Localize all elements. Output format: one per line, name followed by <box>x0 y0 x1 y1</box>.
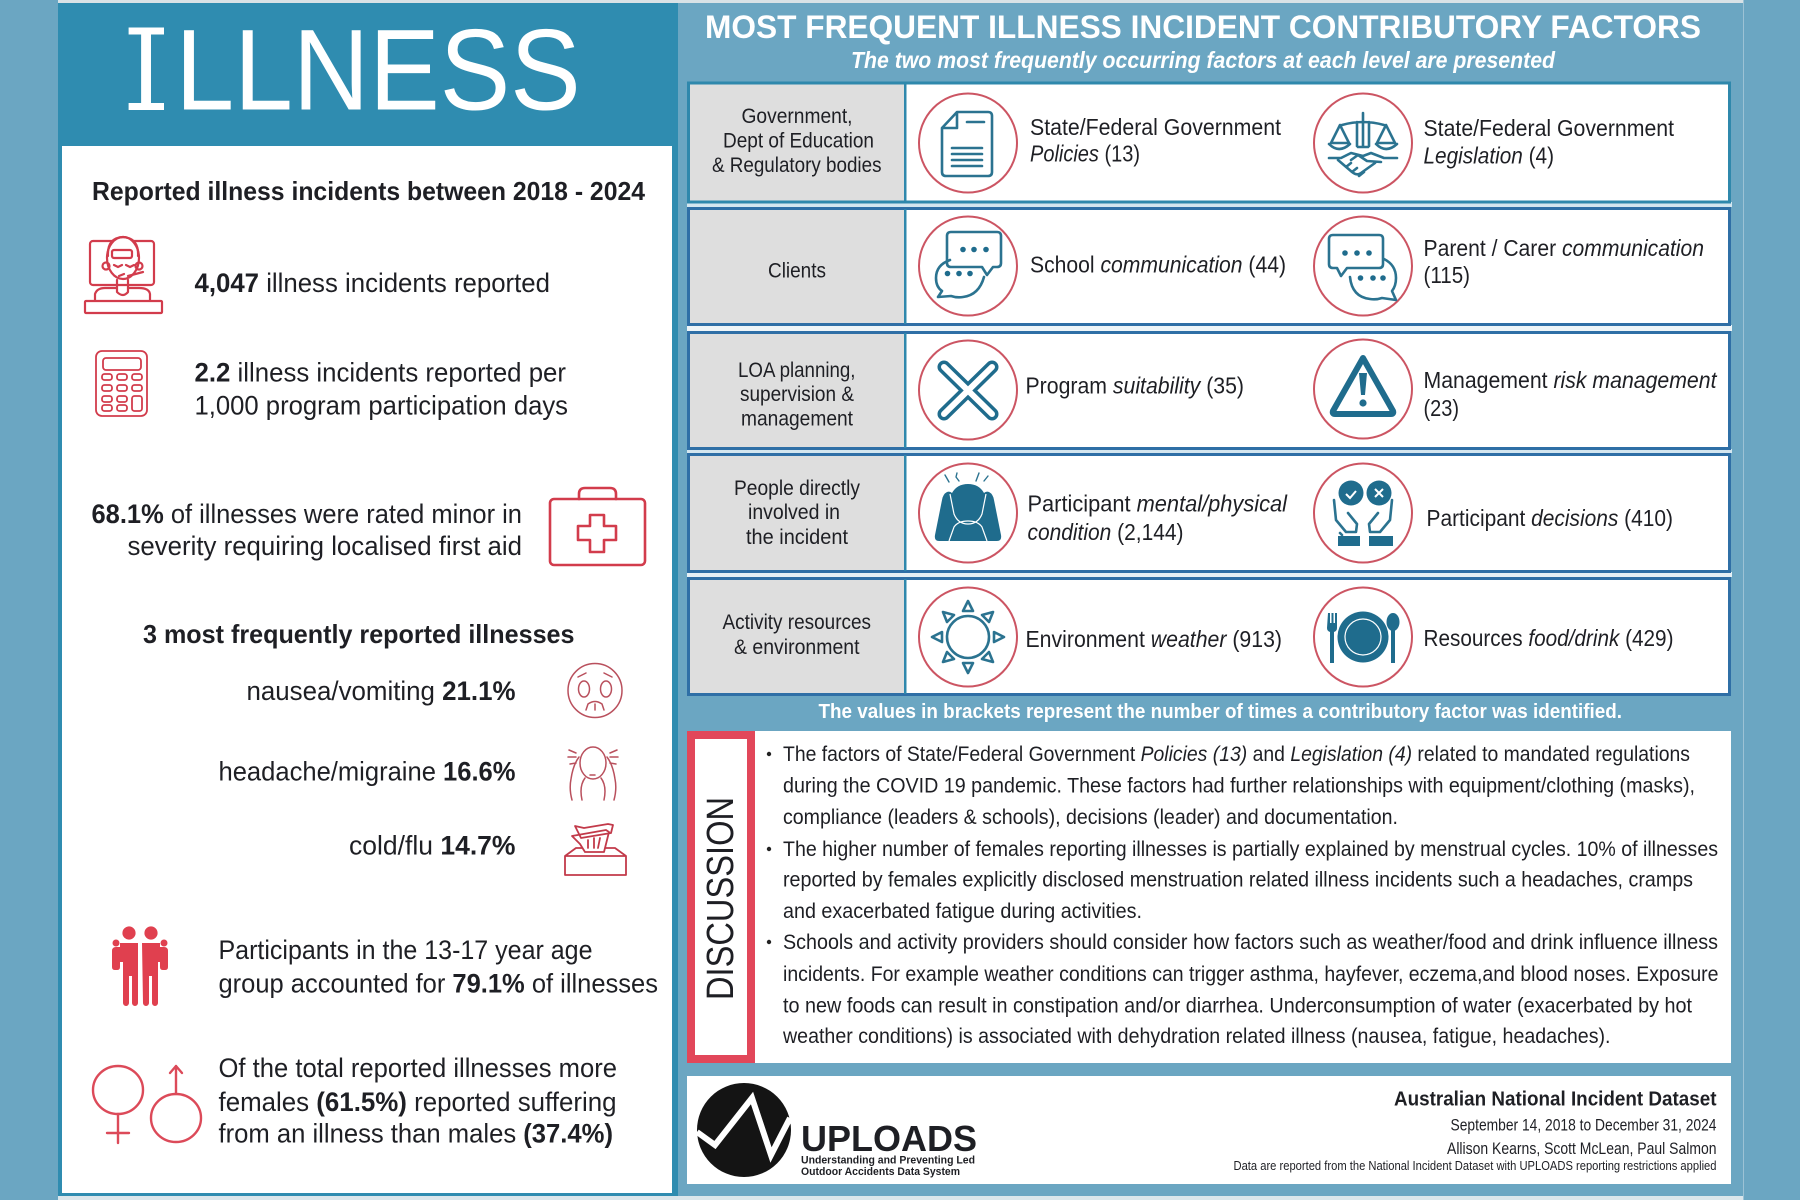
icon: document <box>919 94 1017 192</box>
factor: risk management: (23) <box>1424 395 1459 421</box>
factor: weather: Environment weather (913) <box>1026 626 1282 652</box>
dataset credits: Allison Kearns, Scott McLean, Paul Salmon <box>1447 1139 1716 1158</box>
icon: cross <box>919 340 1017 440</box>
level label: Activity resources <box>722 611 871 634</box>
dataset credits: Data are reported from the National Incident Dataset with UPLOADS reporting restrictions applied <box>1234 1158 1716 1173</box>
level label: LOA planning, <box>738 359 856 382</box>
level label: involved in <box>748 501 840 524</box>
panel: illness statistics <box>58 3 678 1196</box>
heading: contributory factors: MOST FREQUENT ILLNESS INCIDENT CONTRIBUTORY FACTORS <box>705 9 1701 45</box>
factor: policies: Policies (13) <box>1030 140 1140 166</box>
icon: decision hands <box>1314 464 1412 562</box>
factor: food and drink: Resources food/drink (429) <box>1424 625 1674 651</box>
logo: UPLOADS <box>697 1083 977 1178</box>
logo: UPLOADS: UPLOADS <box>801 1118 977 1159</box>
level label: supervision & <box>740 383 854 406</box>
text: age group: Participants in the 13-17 year age <box>218 935 592 965</box>
subtitle: The two most frequently occurring factors at each level are presented <box>851 47 1556 73</box>
icon: sick person at monitor <box>85 237 162 313</box>
text: nausea: nausea/vomiting 21.1% <box>246 676 516 706</box>
text: incident rate: 2.2 illness incidents reported per <box>194 358 566 388</box>
factor: parent communication <box>1424 235 1704 288</box>
level label <box>738 359 856 430</box>
table: contributory factors by level <box>687 83 1732 694</box>
note: values in brackets: The values in brackets represent the number of times a contributory factor was identified. <box>818 701 1622 723</box>
row: LOA planning <box>688 332 1730 448</box>
factor: mental physical condition <box>1028 490 1288 545</box>
text: gender split: females (61.5%) reported suffering <box>218 1087 616 1117</box>
level label: & Regulatory bodies <box>712 154 882 177</box>
level label: & environment <box>734 636 860 659</box>
level label: Government, <box>742 105 852 128</box>
discussion text: Schools and activity providers should consider how factors such as weather/food and drink influence illness <box>783 931 1718 954</box>
panel: discussion <box>687 731 1731 1063</box>
factor: risk management <box>1424 367 1718 421</box>
discussion text: weather conditions) is associated with dehydration related illness (nausea, fatigue, headaches). <box>782 1025 1610 1048</box>
factor: school communication: School communication (44) <box>1030 252 1286 278</box>
factor: mental physical condition: Participant mental/physical <box>1028 490 1288 516</box>
dataset credits <box>1234 1088 1717 1173</box>
icon: first aid kit <box>550 488 645 565</box>
row: government <box>688 83 1730 202</box>
factor: legislation <box>1424 115 1675 168</box>
level label: Clients <box>768 260 826 282</box>
icon: tissue box <box>565 824 626 875</box>
text: gender split: from an illness than males (37.4%) <box>218 1118 613 1148</box>
icon: sun <box>919 588 1017 686</box>
dataset credits: September 14, 2018 to December 31, 2024 <box>1450 1116 1716 1134</box>
text: incident rate <box>194 358 568 420</box>
discussion text: The higher number of females reporting illnesses is partially explained by menstrual cycles. 10% of illnesses <box>783 838 1718 861</box>
level label: management <box>741 408 853 430</box>
icon: female and male symbols <box>93 1066 201 1143</box>
discussion text: to new foods can result in constipation and/or diarrhea. Underconsumption of water (exacerbated by hot <box>783 994 1692 1018</box>
discussion text: reported by females explicitly disclosed menstruation related illness incidents such a headaches, cramps <box>783 868 1693 892</box>
text: severity: 68.1% of illnesses were rated minor in <box>92 499 522 529</box>
icon: stressed person <box>919 464 1017 562</box>
level label <box>734 477 860 549</box>
factor: parent communication: Parent / Carer communication <box>1424 235 1704 261</box>
discussion text: The factors of State/Federal Government Policies (13) and Legislation (4) related to mandated regulations <box>783 743 1690 766</box>
factor: program suitability: Program suitability (35) <box>1026 372 1244 398</box>
discussion text: incidents. For example weather conditions can trigger asthma, hayfever, eczema,and blood noses. Exposure <box>783 963 1718 986</box>
text: incidents reported: 4,047 illness incidents reported <box>194 268 550 298</box>
discussion text: and exacerbated fatigue during activities. <box>783 900 1142 923</box>
text: severity <box>92 499 522 561</box>
row: clients <box>688 208 1730 324</box>
heading: contributory factors <box>705 9 1701 73</box>
row: people directly involved <box>688 454 1730 572</box>
discussion label: DISCUSSION <box>700 797 742 1000</box>
discussion text: during the COVID 19 pandemic. These factors had further relationships with equipment/clothing (masks), <box>783 774 1695 798</box>
icon: calculator <box>96 351 147 416</box>
icon: school chat <box>919 216 1017 316</box>
text: headache: headache/migraine 16.6% <box>218 756 516 786</box>
icon: headache <box>568 747 618 800</box>
text: incident rate: 1,000 program participation days <box>194 390 568 420</box>
icon: plate and cutlery <box>1314 588 1412 686</box>
level label: People directly <box>734 477 860 500</box>
row: activity resources <box>688 578 1730 694</box>
logo: UPLOADS: Understanding and Preventing Led <box>801 1154 975 1166</box>
title: ILLNESS: ILLNESS <box>131 6 581 134</box>
logo: UPLOADS: Outdoor Accidents Data System <box>801 1166 960 1178</box>
text: age group <box>218 935 658 998</box>
icon: two people <box>112 926 168 1006</box>
level label <box>712 105 882 177</box>
factor: legislation: State/Federal Government <box>1424 115 1675 141</box>
dataset credits: Australian National Incident Dataset <box>1394 1088 1717 1110</box>
text: cold and flu: cold/flu 14.7% <box>349 830 516 860</box>
icon: nausea face <box>568 664 622 718</box>
discussion label <box>687 731 755 1063</box>
factor: policies <box>1030 114 1282 166</box>
text: age group: group accounted for 79.1% of illnesses <box>218 968 658 998</box>
heading: reported incidents: Reported illness incidents between 2018 - 2024 <box>92 176 646 206</box>
text: severity: severity requiring localised first aid <box>128 531 522 561</box>
icon: warning triangle <box>1314 340 1412 438</box>
factor: mental physical condition: condition (2,144) <box>1028 519 1184 545</box>
text: gender split <box>218 1053 617 1148</box>
level label: Dept of Education <box>723 130 874 152</box>
text: gender split: Of the total reported illnesses more <box>218 1053 617 1083</box>
discussion text: compliance (leaders & schools), decisions (leader) and documentation. <box>783 806 1398 829</box>
factor: parent communication: (115) <box>1424 262 1470 288</box>
heading: most frequent illnesses: 3 most frequently reported illnesses <box>143 619 574 649</box>
panel: footer <box>687 1076 1731 1184</box>
discussion text <box>767 743 1718 1048</box>
factor: legislation: Legislation (4) <box>1424 142 1554 168</box>
level label <box>722 611 871 659</box>
icon: parent chat <box>1314 216 1412 316</box>
factor: risk management: Management risk management <box>1424 367 1718 393</box>
icon: scales and handshake <box>1314 94 1412 192</box>
factor: participant decisions: Participant decisions (410) <box>1426 505 1673 531</box>
level label: the incident <box>746 526 848 549</box>
factor: policies: State/Federal Government <box>1030 114 1282 140</box>
